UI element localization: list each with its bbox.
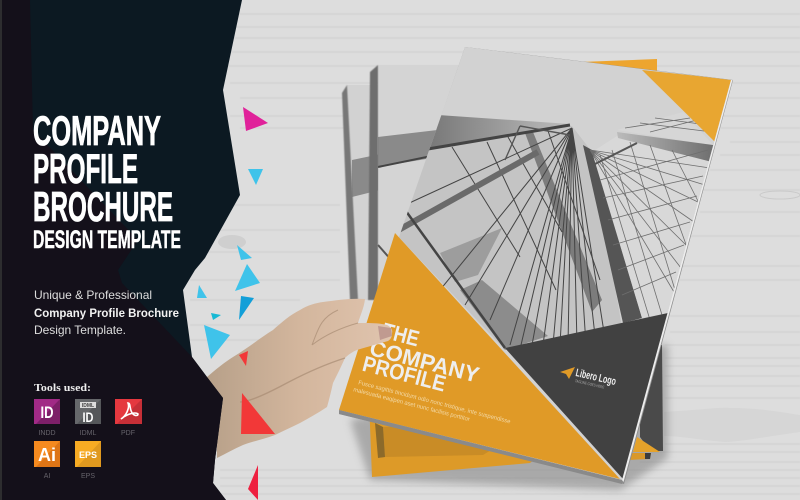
cover orange triangle [339, 233, 620, 479]
icon: EPS: EPS [81, 473, 95, 480]
icon: PDF: PDF [121, 430, 135, 437]
cover orange corner [642, 70, 735, 142]
decorative triangles [197, 107, 275, 500]
right building [593, 156, 709, 318]
icon: IDML [75, 399, 101, 437]
back brochure 2 [378, 68, 458, 258]
description: Company Profile Brochure [34, 306, 179, 320]
back brochure 3 gutter [342, 85, 358, 300]
tools heading: Tools used: [34, 383, 91, 394]
cover dark triangle [505, 313, 668, 479]
description: Unique & Professional [34, 288, 152, 302]
brochure stack shadow [350, 345, 668, 490]
title: COMPANY [33, 107, 161, 154]
title: BROCHURE [33, 183, 173, 230]
main brochure cover [339, 47, 735, 484]
icon: IDML: IDML [82, 403, 94, 409]
icon: IDML: ID [82, 409, 94, 425]
title [33, 107, 181, 254]
cover small copy: malesuada eaqipen aset nunc facilisis porttitor [353, 387, 470, 423]
building photo [395, 70, 735, 350]
icon: Illustrator: AI [44, 473, 50, 480]
icon: InDesign [34, 399, 60, 437]
title: DESIGN TEMPLATE [33, 226, 181, 254]
back brochure orange spreads [369, 59, 663, 477]
icon: EPS: EPS [79, 450, 97, 460]
cover title: COMPANY [367, 335, 482, 388]
icon: PDF [115, 399, 142, 437]
icon: InDesign: INDD [38, 430, 56, 437]
icon: Illustrator [34, 441, 60, 480]
back brochure 3 [347, 85, 378, 300]
hand [207, 299, 392, 458]
cover title: PROFILE [360, 351, 449, 396]
cover title: THE [380, 318, 422, 351]
icon: InDesign: ID [40, 403, 54, 422]
cover logo [560, 367, 617, 392]
description [34, 288, 179, 337]
icon: Illustrator: Ai [38, 445, 56, 465]
title: PROFILE [33, 145, 138, 192]
description: Design Template. [34, 323, 126, 337]
icon: IDML: IDML [80, 430, 96, 437]
cover title [360, 315, 487, 404]
cover small copy: Fusce sagittis tincidunt odio nonc tristique, inte suspendisse [357, 380, 512, 426]
dark left panel [0, 0, 242, 500]
cover logo: TAGLINE GOES HERE [574, 378, 605, 390]
cover logo: Libero Logo [574, 367, 617, 388]
icon: EPS [75, 441, 101, 480]
back brochure 2 gutter [368, 65, 378, 300]
